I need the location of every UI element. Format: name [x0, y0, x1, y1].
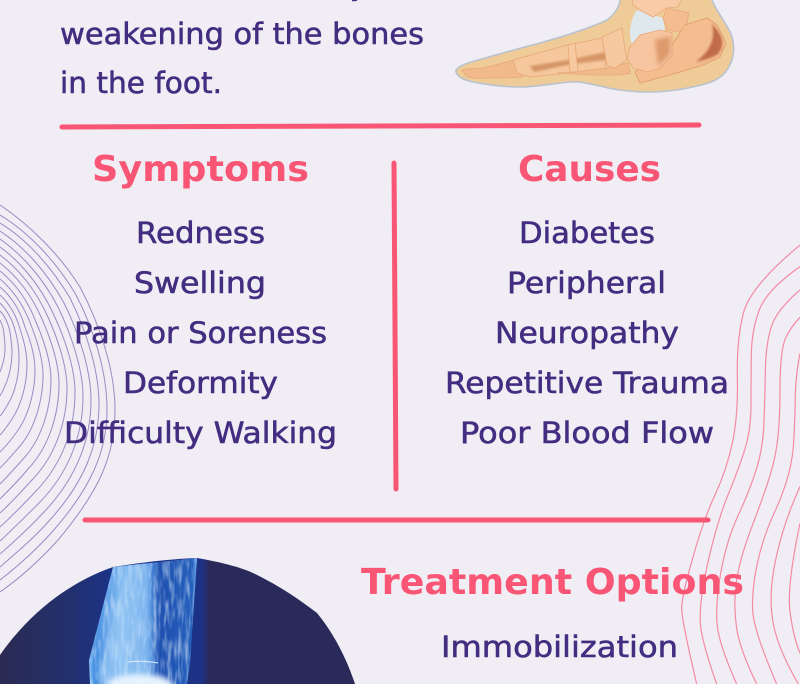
- x-ray dark backdrop: [0, 550, 360, 684]
- divider: bottom: [85, 518, 708, 522]
- metatarsal shading: [530, 52, 606, 72]
- talus shading: [655, 36, 670, 66]
- list: symptoms: [64, 216, 337, 450]
- list: symptoms: Swelling: [134, 266, 266, 300]
- x-ray bone: [89, 558, 197, 684]
- list: causes: Poor Blood Flow: [460, 416, 714, 450]
- intro line: in the foot.: in the foot.: [60, 66, 222, 100]
- x-ray joint highlight: [106, 674, 174, 684]
- intro paragraph (cropped at top): [60, 0, 424, 100]
- x-ray joint line: [128, 661, 158, 663]
- list: causes: Repetitive Trauma: [445, 366, 729, 400]
- panel: symptoms: [64, 149, 337, 450]
- foot skin silhouette: [456, 0, 734, 92]
- list: causes: Neuropathy: [495, 316, 679, 350]
- tibia bone: [632, 0, 682, 17]
- list: symptoms: Difficulty Walking: [64, 416, 337, 450]
- left decorative contour lines: [0, 205, 115, 592]
- intro line: weakening of the bones: weakening of the bones: [60, 17, 424, 51]
- divider: vertical: [394, 163, 396, 489]
- list: symptoms: Deformity: [123, 366, 278, 400]
- panel: causes: [445, 149, 729, 450]
- list: causes: Diabetes: [519, 216, 655, 250]
- lower midfoot bone: [557, 63, 630, 75]
- list: symptoms: Pain or Soreness: [74, 316, 327, 350]
- cuneiform bone: [602, 28, 627, 68]
- talus bone: [627, 30, 672, 72]
- divider: top: [62, 125, 699, 127]
- list: symptoms: Redness: [136, 216, 265, 250]
- navicular bone: [663, 8, 689, 32]
- list: causes: [445, 216, 729, 450]
- right decorative contour lines: [682, 245, 800, 684]
- calcaneus shading: [696, 24, 722, 62]
- cartilage joint: [630, 10, 665, 44]
- calcaneus bone: [635, 18, 726, 83]
- heading: Causes: Causes: [518, 149, 661, 190]
- x-ray bone texture: [89, 558, 197, 684]
- wedge bone: [568, 43, 578, 72]
- phalanges: [462, 60, 523, 78]
- list item: Immobilization: Immobilization: [441, 630, 678, 664]
- heading: Treatment Options: Treatment Options: [361, 562, 744, 603]
- x-ray image: [0, 550, 360, 684]
- illustration: foot bones: [456, 0, 734, 92]
- list: causes: Peripheral: [507, 266, 666, 300]
- panel: treatment options: [361, 562, 744, 664]
- x-ray bright streak: [100, 564, 150, 684]
- metatarsals: [513, 38, 606, 77]
- heading: Symptoms: Symptoms: [92, 149, 309, 190]
